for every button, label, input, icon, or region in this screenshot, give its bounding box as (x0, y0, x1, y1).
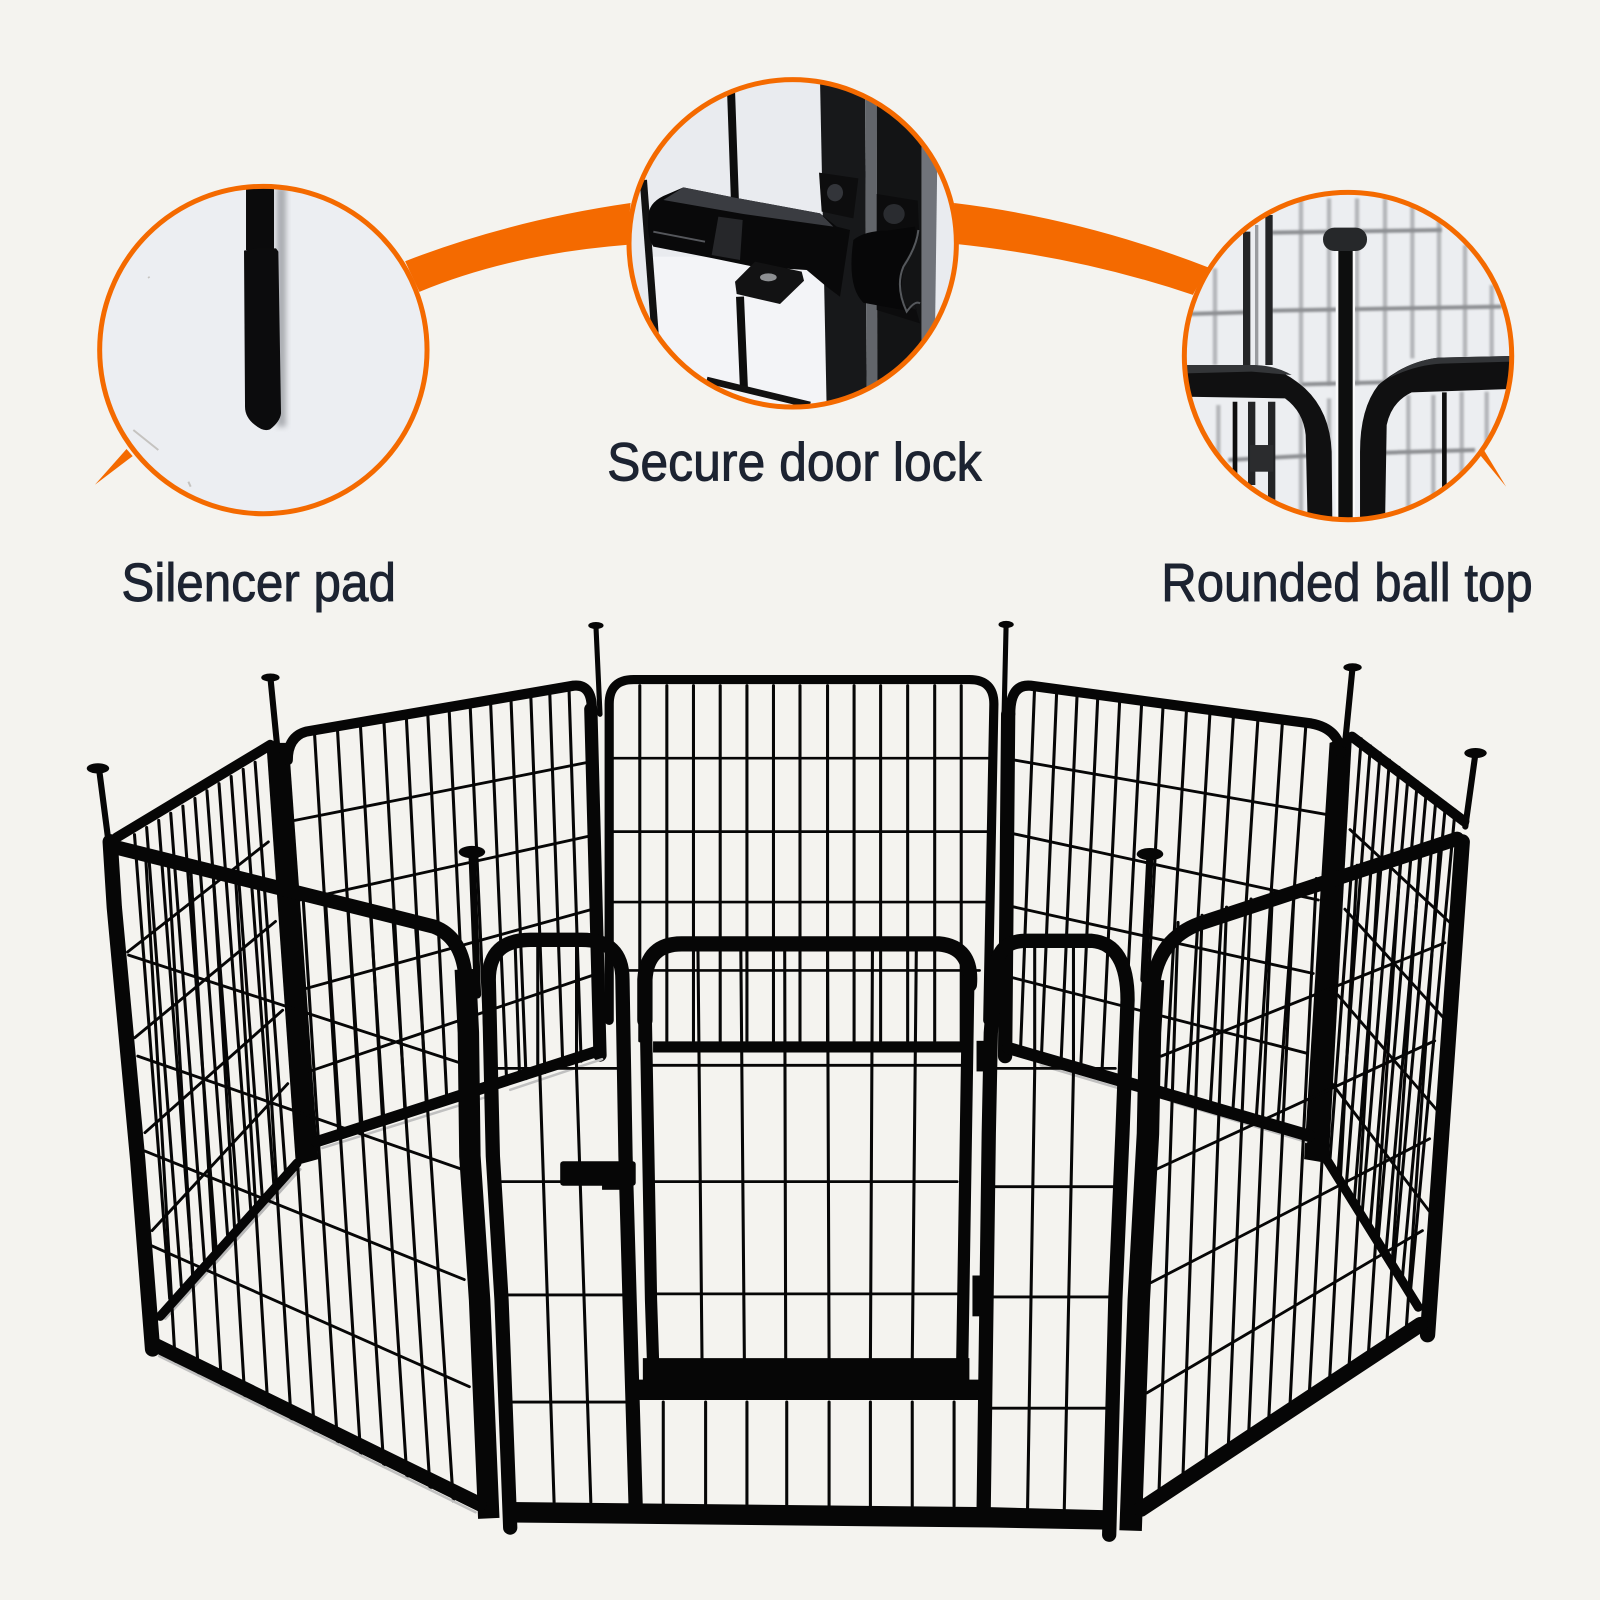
heading: rounded ball top: Rounded ball top (1161, 553, 1533, 613)
hinges on door frame (972, 1041, 987, 1316)
panel: lower door frame section (510, 1402, 1107, 1530)
detail circle: secure door lock (629, 79, 957, 410)
pointer tail: left (95, 449, 133, 485)
detail circle: rounded ball top (1184, 192, 1512, 525)
panel: front narrow left (489, 940, 637, 1528)
playpen fence illustration (87, 621, 1487, 1535)
panel: back right (1005, 685, 1341, 1142)
panel: back center (609, 680, 994, 1041)
panel: front narrow right (984, 941, 1128, 1535)
panel: door (637, 944, 980, 1400)
heading: silencer pad: Silencer pad (121, 553, 396, 613)
panel: back left (288, 685, 602, 1148)
panel: far right side (1304, 735, 1464, 1307)
latch: door lock (560, 1161, 636, 1190)
pointer tail: right (1478, 448, 1506, 487)
arc band: right connector (954, 203, 1208, 295)
arc band: left connector (405, 203, 631, 292)
heading: secure door lock: Secure door lock (607, 433, 983, 493)
panel: front left (110, 842, 489, 1518)
panel: front right (1131, 839, 1462, 1531)
detail circle: silencer pad (99, 183, 427, 514)
panel: far left side (116, 743, 318, 1318)
post: corner poles with rounded tops (87, 621, 1487, 995)
